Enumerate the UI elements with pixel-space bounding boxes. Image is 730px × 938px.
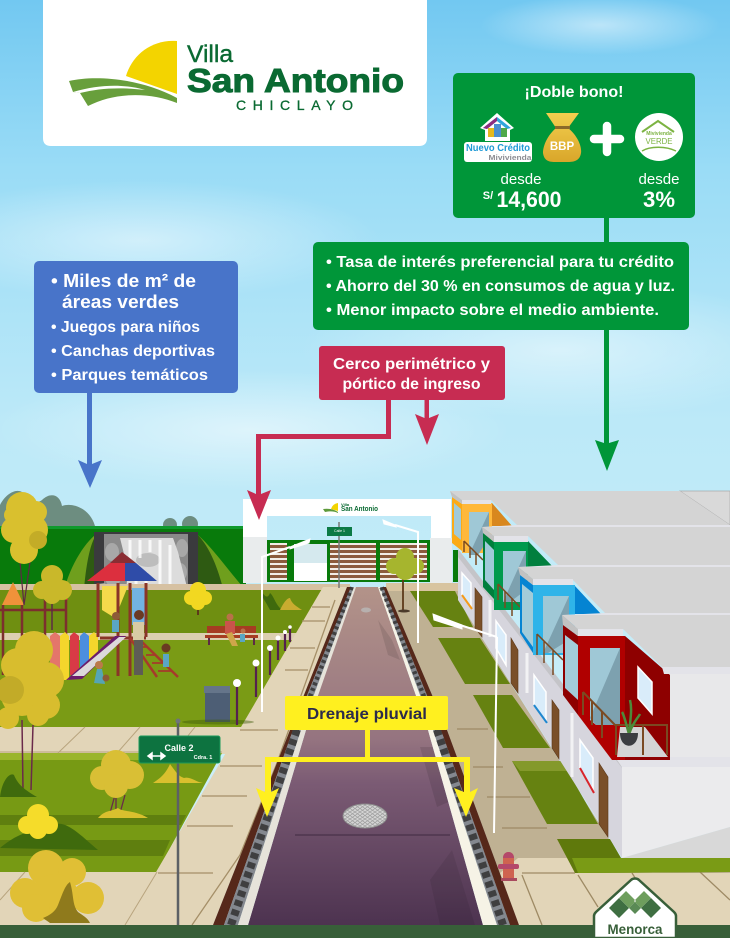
front wall <box>615 667 730 858</box>
right ground <box>386 583 730 925</box>
drainage label: Drenaje pluvial <box>307 706 427 723</box>
price right: 3% <box>643 187 675 212</box>
back roof <box>680 491 730 525</box>
gate logo: Villa <box>341 502 350 507</box>
panel: perimeter fence: Cerco perimétrico y <box>333 356 490 373</box>
icon: Mivivienda Verde: VERDE <box>646 136 673 146</box>
road <box>213 587 519 925</box>
panel: green areas: • Miles de m² de <box>51 270 196 291</box>
panel: benefits: • Ahorro del 30 % en consumos de agua y luz. <box>326 278 675 295</box>
panel: perimeter fence: pórtico de ingreso <box>342 376 481 393</box>
park path <box>0 633 298 640</box>
house 3: blue <box>518 565 730 675</box>
left sidewalk <box>0 587 347 925</box>
big tree left <box>0 631 64 797</box>
houses row <box>450 491 730 858</box>
panel: benefits: • Menor impacto sobre el medio ambiente. <box>326 302 659 319</box>
gate beam and pillars <box>243 499 451 582</box>
left lawn upper <box>0 590 326 636</box>
price left: desde <box>500 171 542 188</box>
panel: green areas: • Canchas deportivas <box>51 343 215 360</box>
window sills <box>462 595 594 793</box>
road surface <box>248 587 483 925</box>
panel: green areas: • Parques temáticos <box>51 367 208 384</box>
left curb and drain <box>213 587 351 925</box>
house 1: orange <box>450 491 730 565</box>
rock hills <box>62 535 253 600</box>
distant grass tuft <box>153 764 203 783</box>
logo fields <box>69 78 177 106</box>
left bottom pavement <box>0 872 160 926</box>
gate fence <box>267 540 430 582</box>
hedge wall <box>0 526 246 586</box>
dark shrub with yellow bush <box>0 804 98 850</box>
panel: green areas <box>34 261 238 393</box>
playground <box>0 552 178 684</box>
small shrubs far lawn <box>262 592 282 610</box>
red arrow to gate <box>247 400 391 520</box>
drainage label <box>285 696 448 730</box>
blue arrow <box>78 393 102 488</box>
waterfall feature <box>62 532 253 605</box>
icon: BBP money bag <box>543 113 581 162</box>
yellow bush by waterfall <box>184 582 212 615</box>
icon: Mivivienda Verde <box>635 113 683 161</box>
gate logo <box>323 502 378 513</box>
house doors <box>475 588 608 837</box>
header logo panel <box>43 0 427 146</box>
potted plant <box>620 700 640 746</box>
header logo panel: San Antonio <box>187 62 404 99</box>
right curb and drain <box>378 587 497 925</box>
swing set <box>0 582 68 675</box>
balcony railing <box>583 692 668 755</box>
small street tree <box>386 548 424 612</box>
ground base: strip behind park <box>0 584 350 592</box>
heading: ¡Doble bono! <box>524 84 624 101</box>
left lawn bottom <box>0 753 222 872</box>
bollard lights <box>233 625 292 725</box>
icon: Mivivienda Verde: Mivivienda <box>646 131 672 137</box>
drainage callout <box>256 696 478 817</box>
large bush bottom <box>10 850 104 923</box>
bush mid lawn <box>90 750 148 818</box>
header logo panel: CHICLAYO <box>236 97 353 113</box>
Menorca logo <box>594 878 676 938</box>
left crosswalk <box>0 727 262 754</box>
price left: S/ <box>483 190 493 202</box>
manhole covers <box>343 804 387 828</box>
street sign Calle 2 <box>139 718 220 925</box>
panel: green areas: áreas verdes <box>62 291 179 312</box>
waste bin <box>182 686 254 724</box>
bench with family <box>205 614 258 646</box>
right lawns <box>410 591 730 873</box>
house windows <box>462 573 652 790</box>
yellow trees and bushes <box>0 492 302 923</box>
road shadows <box>378 620 453 807</box>
street sign Calle 2: Cdra. 1 <box>194 755 212 761</box>
green connector and arrow <box>595 218 619 471</box>
panel: benefits <box>313 242 689 330</box>
street sign Calle 2: Calle 2 <box>164 743 194 753</box>
gate logo: San Antonio <box>341 506 378 513</box>
street lamps <box>262 520 497 833</box>
panel: double bonus <box>453 73 695 218</box>
background bushes <box>0 491 198 532</box>
logo text: Villa <box>187 41 234 68</box>
ladder <box>130 638 178 677</box>
children and adult <box>94 610 170 684</box>
price left: 14,600 <box>496 187 562 212</box>
icon: Nuevo Crédito: Nuevo Crédito <box>466 143 530 154</box>
drainage arrows <box>256 730 478 817</box>
icon: plus <box>594 126 620 152</box>
house 4: red <box>562 613 730 760</box>
icon: Nuevo Crédito: Mivivienda <box>488 153 532 162</box>
price right <box>638 171 680 212</box>
entrance gate <box>243 499 458 584</box>
small street sign at gate: Calle 1 <box>334 529 345 533</box>
coloured fence <box>50 632 98 680</box>
price left <box>483 171 562 212</box>
tree top left <box>1 492 48 605</box>
house 2: green <box>482 525 730 616</box>
panel: green areas: • Juegos para niños <box>51 319 200 336</box>
fire hydrant <box>498 852 519 881</box>
panel: perimeter fence <box>319 346 505 400</box>
small street sign at gate <box>327 522 352 588</box>
logo sun <box>126 41 177 94</box>
icon: BBP money bag: BBP <box>550 141 574 153</box>
price right: desde <box>638 171 680 188</box>
icon: Nuevo Crédito <box>464 113 532 162</box>
slide <box>66 636 126 680</box>
tower <box>66 552 178 680</box>
side wall <box>458 553 622 858</box>
Menorca logo: Menorca <box>608 921 663 937</box>
left lawn lower <box>0 640 293 727</box>
tree mid left <box>33 565 72 630</box>
panel: benefits: • Tasa de interés preferencial para tu crédito <box>326 254 674 271</box>
bottom bar <box>0 925 730 938</box>
red arrow short <box>415 400 439 445</box>
